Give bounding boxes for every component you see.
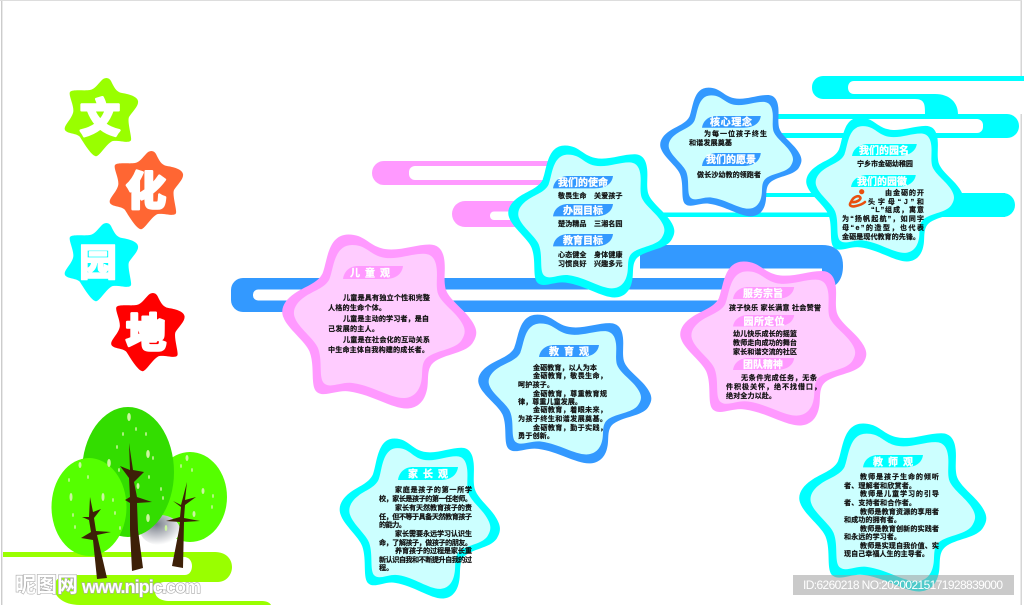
text block: 和谐发展奠基 — [689, 138, 732, 147]
text block: 金砺教育，着眼未来， — [533, 405, 607, 414]
text block: 勇于创新。 — [518, 431, 554, 440]
trees illustration — [52, 407, 227, 579]
text block: 为每一位孩子终生 — [704, 129, 767, 138]
cyan ribbon bars upper right — [660, 76, 1024, 217]
heading tabs: 我们的愿景 — [706, 153, 756, 166]
watermark: image ID bar — [793, 575, 1014, 595]
text block: 家庭是孩子的第一所学 — [395, 485, 472, 494]
text block: 儿童是在社会化的互动关系 — [343, 335, 430, 344]
text block: 幼儿快乐成长的摇篮 — [733, 329, 797, 338]
star shape — [282, 234, 476, 408]
text block: 心态健全 — [558, 250, 586, 259]
text block: 养育孩子的过程是家长重 — [395, 546, 472, 555]
heading tab: 教 师 观 — [873, 456, 913, 468]
panel: 我们的使命 办园目标 教育目标 — [508, 146, 674, 297]
text block: 教师是儿童学习的引导 — [860, 489, 939, 498]
title star: 园 — [65, 223, 138, 301]
heading tab — [863, 455, 923, 468]
text block: 件积极关怀，绝不找借口， — [726, 382, 821, 391]
heading tabs: 园所定位 — [744, 315, 784, 328]
star shape — [660, 88, 801, 216]
watermark: image ID bar: ID:6260218 NO:20200215171928839000 — [803, 578, 1003, 592]
text block: 教师是教育资源的享用者 — [860, 507, 939, 516]
text block: 中生命主体自我构建的成长者。 — [328, 345, 429, 354]
heading tabs: 核心理念 — [710, 116, 752, 128]
text block: 者、支持者和合作者。 — [844, 498, 916, 507]
star shape — [478, 315, 651, 463]
text block: 教师是教育创新的实践者 — [860, 524, 939, 533]
title star: 文: 文 — [80, 97, 120, 141]
heading tabs — [702, 116, 761, 166]
text block — [558, 191, 622, 268]
tree: centre — [82, 407, 174, 537]
text block — [726, 303, 821, 400]
text block: 头字母“J”和 — [868, 197, 924, 206]
text block: 由金砺的开 — [885, 188, 924, 197]
tree shadow — [140, 515, 180, 545]
text block: 己发展的主人。 — [328, 324, 379, 333]
heading tabs: 我们的园徽 — [857, 175, 907, 188]
title star: 化: 化 — [126, 170, 166, 214]
heading tab: 儿 童 观 — [350, 266, 390, 280]
text block: 金砺教育，敬畏生命， — [533, 371, 607, 380]
watermark: nipic logo — [15, 574, 201, 597]
heading tabs: 我们的使命 — [558, 176, 608, 189]
text block: 教师是实现自我价值、实 — [860, 541, 939, 550]
text block — [844, 472, 939, 558]
text block: 孩子快乐 家长满意 社会赞誉 — [729, 303, 821, 312]
panel: 我们的园名 我们的园徽 — [806, 118, 963, 261]
tree: left — [52, 458, 126, 556]
text block: 校，家长是孩子的第一任老师。 — [379, 494, 472, 503]
text block: 无条件完成任务，无条 — [741, 373, 817, 382]
text block: 家长和谐交流的社区 — [733, 347, 797, 356]
panel: 教师观 — [799, 424, 986, 591]
text block: 关爱孩子 — [594, 191, 622, 200]
panel: 家长观 — [340, 439, 500, 598]
watermark: nipic logo: www.nipic.com — [81, 577, 201, 597]
blue bars — [231, 245, 843, 312]
text block: 金砺是现代教育的先锋。 — [842, 232, 920, 241]
text block: 家长有天然教育孩子的责 — [395, 503, 472, 512]
panel: 服务宗旨 园所定位 团队精神 — [680, 262, 866, 425]
heading tabs: 教育目标 — [563, 234, 603, 247]
heading tabs — [851, 144, 917, 188]
text block: 三湘名园 — [594, 219, 622, 228]
watermark: nipic logo: 昵图网 — [15, 574, 78, 597]
heading tabs — [733, 287, 794, 371]
text block: 程。 — [379, 563, 393, 572]
tree: right — [153, 452, 227, 542]
text block: 呵护孩子。 — [518, 380, 554, 389]
text block: 做长沙幼教的领跑者 — [697, 170, 761, 179]
text block: 金砺教育，以人为本 — [533, 363, 597, 372]
star shape — [340, 439, 500, 598]
text block: 为“扬帆起航”，如同字 — [842, 214, 924, 223]
heading tabs: 办园目标 — [563, 204, 603, 217]
heading tabs — [553, 176, 613, 247]
heading tab — [343, 266, 403, 280]
pink bars — [372, 161, 569, 227]
title star: 园: 园 — [79, 243, 117, 285]
text block — [842, 159, 924, 241]
text block: 者、理解者和欣赏者。 — [844, 481, 916, 490]
icon: kindergarten logo — [850, 189, 865, 206]
star shape — [508, 146, 674, 297]
text block: 的能力。 — [379, 520, 406, 529]
title: 文化园地 — [65, 78, 185, 371]
star shape — [680, 262, 866, 425]
text block: 家长需要永远学习认识生 — [395, 529, 472, 538]
leaves — [68, 413, 214, 531]
text block: 敬畏生命 — [558, 191, 586, 200]
heading tabs: 服务宗旨 — [743, 287, 783, 300]
text block — [518, 363, 607, 440]
text block: 身体健康 — [594, 250, 622, 259]
heading tabs: 我们的园名 — [859, 144, 909, 157]
green ground ribbon — [3, 552, 271, 605]
text block: 金砺教育，勤于实践， — [533, 423, 607, 432]
panel: 儿童观 — [282, 234, 476, 408]
text block: 教师是孩子生命的倾听 — [860, 472, 939, 481]
text block: 和成功的拥有者。 — [844, 515, 901, 524]
text block: 人格的生命个体。 — [328, 303, 386, 312]
text block: 律，尊重儿童发展。 — [518, 397, 582, 406]
text block — [379, 485, 472, 572]
text block: 金砺教育，尊重教育规 — [533, 389, 607, 398]
title star: 化 — [110, 151, 183, 229]
trunks — [81, 443, 200, 579]
text block: 楚沩精品 — [558, 219, 586, 228]
text block: 习惯良好 — [558, 259, 586, 268]
star shape — [806, 118, 963, 261]
text block — [328, 293, 430, 354]
text block: 命，了解孩子，做孩子的朋友。 — [379, 538, 472, 547]
text block: 儿童是具有独立个性和完整 — [343, 293, 430, 302]
text block: 新认识自我和不断提升自我的过 — [379, 555, 472, 564]
text block: 和永远的学习者。 — [844, 532, 901, 541]
title star: 地 — [111, 293, 185, 371]
star shape — [799, 424, 986, 591]
text block: 儿童是主动的学习者，是自 — [343, 314, 429, 323]
text block: 绝对全力以赴。 — [726, 391, 776, 400]
text block: 兴趣多元 — [594, 259, 622, 268]
heading tab — [539, 345, 599, 358]
text block: 教师走向成功的舞台 — [733, 338, 797, 347]
heading tab — [398, 467, 458, 480]
text block: 母“e”的造型，也代表 — [842, 223, 924, 232]
title star: 地: 地 — [126, 312, 166, 356]
panel: 教育观 — [478, 315, 651, 463]
panel: 核心理念 我们的愿景 — [660, 88, 801, 216]
heading tab: 家 长 观 — [408, 468, 448, 480]
heading tab: 教 育 观 — [549, 345, 589, 358]
title star: 文 — [65, 78, 138, 156]
text block: 为孩子终生和谐发展奠基。 — [518, 414, 607, 423]
text block: 现自己幸福人生的主导者。 — [844, 549, 929, 558]
text block: “L”组成，寓意 — [871, 205, 924, 214]
heading tabs: 团队精神 — [743, 358, 783, 371]
text block: 宁乡市金砺幼稚园 — [857, 159, 913, 168]
text block: 任，但不等于具备天然教育孩子 — [379, 512, 472, 521]
text block — [689, 129, 767, 179]
